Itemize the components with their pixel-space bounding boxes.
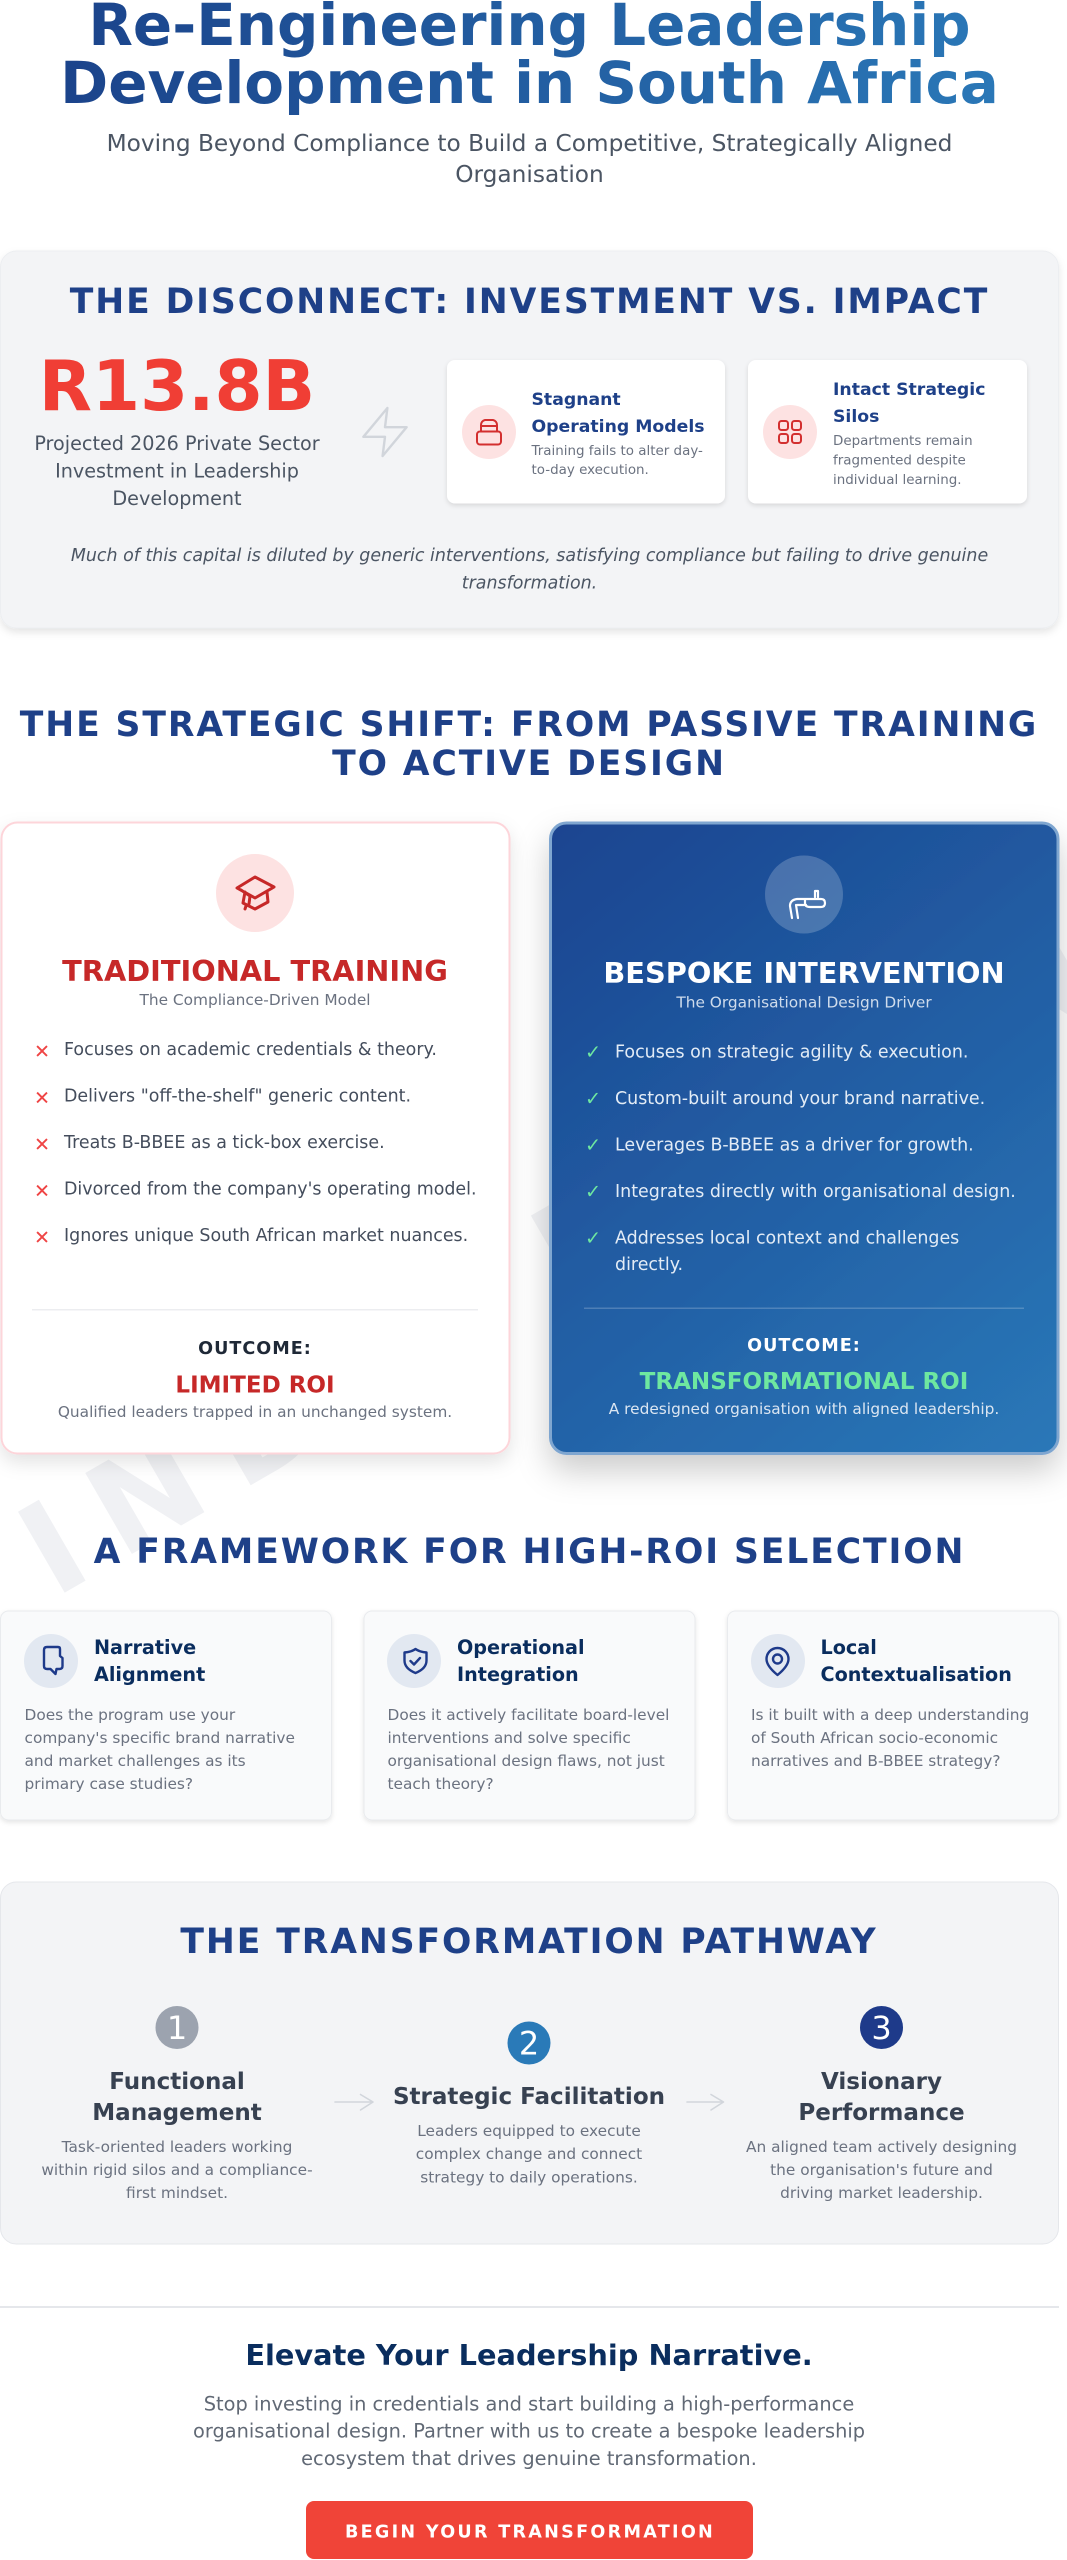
framework card: local contextualisation — [728, 1611, 1058, 1820]
icon: shield check — [387, 1634, 441, 1688]
heading: strategic shift — [20, 705, 1038, 784]
icon: lightning bolt — [363, 408, 407, 456]
step 2: Strategic Facilitation — [393, 2084, 665, 2110]
heading: strategic shift: TO ACTIVE DESIGN — [332, 744, 726, 784]
step 1: Functional — [109, 2069, 245, 2095]
list: traditional failings: Divorced from the company's operating model. — [64, 1180, 477, 1200]
list: traditional failings: Focuses on academic credentials & theory. — [64, 1040, 437, 1060]
icon: location pin — [751, 1634, 805, 1688]
card body: narratives and B-BBEE strategy? — [751, 1752, 1001, 1770]
step 3: Performance — [798, 2100, 965, 2126]
heading: pathway: THE TRANSFORMATION PATHWAY — [180, 1922, 878, 1962]
card: stagnant operating models — [447, 360, 725, 504]
step 2: 2 — [519, 2024, 539, 2062]
list: traditional failings: Delivers "off-the-shelf" generic content. — [64, 1086, 411, 1106]
card text — [833, 380, 985, 488]
list: bespoke strengths: Integrates directly with organisational design. — [615, 1182, 1016, 1202]
card title: Narrative — [94, 1636, 196, 1659]
card title — [94, 1636, 205, 1686]
italic note: Much of this capital is diluted by generic interventions, satisfying compliance but failing to drive genuine — [71, 546, 988, 566]
italic note: transformation. — [462, 574, 597, 594]
card body: of South African socio-economic — [751, 1729, 998, 1747]
list: traditional failings: ✕ — [34, 1133, 50, 1156]
step 1: within rigid silos and a compliance- — [41, 2161, 313, 2179]
framework card: operational integration — [364, 1611, 695, 1820]
list: bespoke strengths: directly. — [615, 1255, 683, 1275]
list: bespoke strengths: Addresses local context and challenges — [615, 1228, 959, 1248]
arrow — [687, 2094, 724, 2110]
arrow — [335, 2094, 373, 2110]
card body: organisational design flaws, not just — [388, 1752, 665, 1770]
card body: Is it built with a deep understanding — [751, 1706, 1029, 1724]
card title: Contextualisation — [820, 1663, 1012, 1686]
step 2 — [393, 2022, 665, 2186]
card body: company's specific brand narrative — [24, 1729, 295, 1747]
title — [60, 0, 999, 117]
list: traditional failings: ✕ — [34, 1226, 50, 1249]
list: traditional failings: ✕ — [34, 1086, 50, 1110]
card text: Training fails to alter day- — [530, 444, 703, 459]
cta text: Stop investing in credentials and start building a high-performance — [204, 2392, 854, 2416]
stat caption: Development — [112, 487, 242, 510]
step 3 — [746, 2006, 1017, 2202]
italic note — [71, 546, 988, 594]
outcome: transformational ROI: OUTCOME: — [747, 1336, 861, 1356]
list: traditional failings — [34, 1040, 477, 1249]
list: bespoke strengths: ✓ — [585, 1180, 601, 1203]
outcome: limited ROI: LIMITED ROI — [175, 1372, 335, 1398]
step 3: Visionary — [821, 2069, 942, 2095]
cta text — [193, 2392, 865, 2470]
subheading: The Compliance-Driven Model — [138, 991, 371, 1009]
heading: disconnect: THE DISCONNECT: INVESTMENT VS. IMPACT — [70, 282, 989, 322]
step 3: the organisation's future and — [770, 2161, 993, 2179]
card text: Operating Models — [532, 417, 705, 437]
card text: Departments remain — [833, 434, 973, 449]
subtitle: Moving Beyond Compliance to Build a Competitive, Strategically Aligned — [107, 130, 952, 157]
list: bespoke strengths — [585, 1040, 1016, 1275]
cta text: organisational design. Partner with us to create a bespoke leadership — [193, 2420, 865, 2442]
step 1 — [41, 2006, 313, 2202]
button: BEGIN YOUR TRANSFORMATION — [345, 2522, 715, 2542]
list: bespoke strengths: ✓ — [585, 1226, 601, 1250]
outcome: limited ROI — [58, 1339, 452, 1421]
outcome: transformational ROI — [609, 1336, 999, 1418]
step 3: 3 — [871, 2009, 892, 2047]
card body: interventions and solve specific — [388, 1729, 631, 1747]
heading: bespoke intervention: BESPOKE INTERVENTION — [603, 956, 1005, 990]
icon: speech bubble — [24, 1634, 78, 1688]
cta text: ecosystem that drives genuine transformation. — [301, 2447, 757, 2470]
card body: Does it actively facilitate board-level — [388, 1706, 669, 1724]
heading: framework: A FRAMEWORK FOR HIGH-ROI SELECTION — [94, 1532, 965, 1572]
card body: teach theory? — [388, 1775, 494, 1793]
stat caption: Projected 2026 Private Sector — [34, 432, 320, 455]
card body: Does the program use your — [24, 1706, 236, 1724]
card text: to-day execution. — [532, 463, 649, 478]
button — [306, 2501, 753, 2559]
card title — [820, 1636, 1012, 1686]
heading: call to action: Elevate Your Leadership Narrative. — [245, 2338, 813, 2372]
panel: bespoke intervention — [550, 823, 1058, 1454]
card text: individual learning. — [833, 473, 962, 488]
step 3: driving market leadership. — [780, 2184, 983, 2202]
outcome: transformational ROI: TRANSFORMATIONAL ROI — [640, 1369, 968, 1395]
list: bespoke strengths: ✓ — [585, 1040, 601, 1064]
list: traditional failings: Ignores unique South African market nuances. — [64, 1226, 468, 1246]
big stat: R13.8B — [39, 347, 315, 427]
step 1: Task-oriented leaders working — [61, 2138, 292, 2156]
list: bespoke strengths: Leverages B-BBEE as a driver for growth. — [615, 1136, 974, 1156]
subtitle: Organisation — [455, 161, 604, 188]
list: bespoke strengths: ✓ — [585, 1087, 601, 1110]
framework card: narrative alignment — [0, 1611, 332, 1820]
card text — [530, 390, 705, 478]
panel: transformation pathway — [0, 1882, 1058, 2244]
icon: graduation cap — [216, 854, 294, 932]
card title — [457, 1636, 585, 1686]
card text: Stagnant — [532, 390, 621, 410]
card title: Local — [820, 1636, 877, 1659]
card body: and market challenges as its — [24, 1752, 246, 1770]
list: traditional failings: ✕ — [34, 1180, 50, 1202]
step 2: Leaders equipped to execute — [417, 2122, 641, 2140]
panel: the disconnect — [0, 251, 1058, 628]
step 2: strategy to daily operations. — [420, 2168, 638, 2186]
card body — [388, 1706, 669, 1793]
card body — [24, 1706, 295, 1793]
step 1: first mindset. — [126, 2184, 228, 2202]
card title: Integration — [457, 1663, 579, 1686]
card title: Operational — [457, 1636, 585, 1659]
list: bespoke strengths: Focuses on strategic agility & execution. — [615, 1042, 968, 1062]
icon: hand — [765, 856, 843, 934]
step 1: Management — [92, 2100, 262, 2126]
icon: stacked box — [462, 405, 516, 459]
heading: traditional training: TRADITIONAL TRAINING — [62, 954, 448, 988]
list: bespoke strengths: ✓ — [585, 1134, 601, 1156]
card title: Alignment — [94, 1663, 205, 1686]
panel: traditional training — [2, 822, 510, 1454]
title: Development in South Africa — [60, 49, 999, 117]
stat caption — [34, 432, 320, 510]
subtitle — [107, 130, 952, 188]
step 1: 1 — [167, 2009, 187, 2047]
subheading: The Organisational Design Driver — [675, 994, 932, 1012]
card body — [751, 1706, 1029, 1770]
card text: Intact Strategic — [833, 380, 985, 400]
outcome: limited ROI: Qualified leaders trapped in an unchanged system. — [58, 1403, 452, 1421]
card text: fragmented despite — [833, 454, 966, 468]
icon: four squares — [763, 405, 817, 459]
card: intact strategic silos — [748, 360, 1027, 504]
heading: strategic shift: THE STRATEGIC SHIFT: FROM PASSIVE TRAINING — [20, 705, 1038, 745]
card body: primary case studies? — [24, 1775, 193, 1793]
list: bespoke strengths: Custom-built around your brand narrative. — [615, 1089, 985, 1109]
stat caption: Investment in Leadership — [55, 460, 299, 482]
outcome: limited ROI: OUTCOME: — [198, 1339, 312, 1359]
step 2: complex change and connect — [416, 2145, 642, 2163]
outcome: transformational ROI: A redesigned organisation with aligned leadership. — [609, 1400, 999, 1418]
list: traditional failings: ✕ — [34, 1040, 50, 1063]
step 3: An aligned team actively designing — [746, 2138, 1017, 2156]
card text: Silos — [833, 407, 879, 427]
list: traditional failings: Treats B-BBEE as a tick-box exercise. — [63, 1133, 385, 1153]
